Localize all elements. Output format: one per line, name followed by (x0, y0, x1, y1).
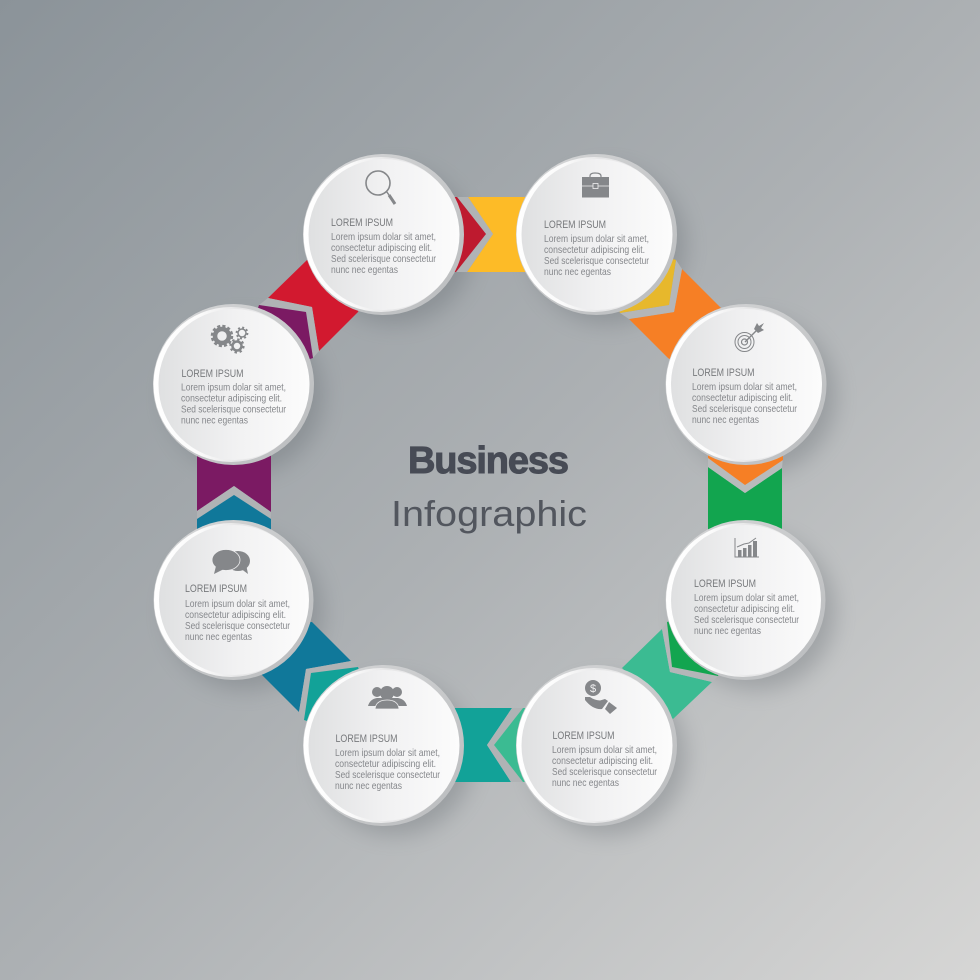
text: circle 8: Sed scelerisque consectetur (181, 404, 286, 416)
circle shadows (167, 168, 836, 835)
text: circle 6: nunc nec egentas (335, 781, 402, 792)
panel: circle 1 search (303, 154, 464, 315)
panel: circle 8 gears (153, 304, 314, 465)
text: circle 5: Sed scelerisque consectetur (552, 767, 657, 778)
panel: circle 2 briefcase (516, 154, 677, 315)
text: circle 4 (694, 578, 799, 637)
text: circle 8: LOREM IPSUM (182, 368, 244, 380)
text: circle 6: Sed scelerisque consectetur (335, 770, 440, 781)
text: circle 5: Lorem ipsum dolar sit amet, (552, 745, 657, 756)
icon: magnifier (366, 171, 395, 204)
text: circle 4: Sed scelerisque consectetur (694, 615, 799, 626)
text: circle 6 (335, 733, 440, 792)
icon: target (735, 323, 764, 352)
icon: briefcase (582, 173, 609, 198)
text: circle 4: Lorem ipsum dolar sit amet, (694, 593, 799, 604)
icon: gears (212, 326, 248, 352)
ribbon: red (233, 234, 383, 384)
text: circle 3: LOREM IPSUM (692, 367, 754, 379)
ribbon: green (708, 450, 783, 530)
text: circle 6: LOREM IPSUM (336, 733, 398, 745)
text: circle 3: nunc nec egentas (692, 415, 759, 426)
text: circle 7 (185, 583, 290, 643)
title (391, 440, 587, 534)
text: circle 4: consectetur adipiscing elit. (694, 604, 795, 615)
icon: hand with coin (585, 680, 617, 714)
text: circle 3 (692, 367, 797, 426)
text: circle 1: LOREM IPSUM (331, 217, 393, 229)
text: circle 7: Sed scelerisque consectetur (185, 621, 290, 632)
text: circle 7: nunc nec egentas (185, 632, 252, 643)
text: circle 2: LOREM IPSUM (544, 219, 606, 231)
text: circle 8 (181, 368, 286, 426)
text: circle 8: nunc nec egentas (181, 416, 248, 426)
icon: people (368, 686, 407, 709)
text: circle 2: nunc nec egentas (544, 267, 611, 278)
text: circle 7: consectetur adipiscing elit. (185, 610, 286, 621)
panel: circle 6 people (303, 665, 464, 826)
ribbon: light green (622, 600, 745, 719)
text: circle 1: consectetur adipiscing elit. (331, 243, 432, 254)
ribbon: yellow (440, 197, 530, 272)
text: circle 1 (331, 217, 436, 276)
title: Infographic (391, 493, 587, 534)
title: Business (408, 440, 569, 482)
ribbon: orange (596, 234, 725, 380)
text: circle 5: nunc nec egentas (552, 778, 619, 789)
ribbon: blue (240, 620, 383, 745)
panel: circle 5 money (516, 665, 677, 826)
text: circle 6: Lorem ipsum dolar sit amet, (335, 748, 440, 759)
text: circle 2 (544, 219, 649, 278)
text: circle 2: Sed scelerisque consectetur (544, 256, 649, 267)
text: circle 3: consectetur adipiscing elit. (692, 393, 793, 404)
text: circle 5: LOREM IPSUM (552, 730, 614, 742)
panel: circle 4 chart (666, 520, 826, 680)
text: circle 4: LOREM IPSUM (694, 578, 756, 590)
panel: circle 3 target (666, 304, 826, 465)
text: circle 2: Lorem ipsum dolar sit amet, (544, 234, 649, 245)
text: circle 2: consectetur adipiscing elit. (544, 245, 645, 256)
text: circle 1: nunc nec egentas (331, 265, 398, 276)
text: circle 4: nunc nec egentas (694, 626, 761, 637)
text: circle 3: Sed scelerisque consectetur (692, 404, 797, 415)
text: circle 7: Lorem ipsum dolar sit amet, (185, 599, 290, 610)
text: circle 8: Lorem ipsum dolar sit amet, (181, 382, 286, 394)
icon: bar chart (735, 538, 759, 557)
ribbon: purple (197, 450, 271, 535)
text: circle 7: LOREM IPSUM (185, 583, 247, 595)
text: circle 1: Sed scelerisque consectetur (331, 254, 436, 265)
icon: hand with coin: $ (590, 683, 596, 695)
text: circle 1: Lorem ipsum dolar sit amet, (331, 232, 436, 243)
text: circle 5: consectetur adipiscing elit. (552, 756, 653, 767)
text: circle 6: consectetur adipiscing elit. (335, 759, 436, 770)
ribbon: teal (450, 708, 540, 782)
text: circle 8: consectetur adipiscing elit. (181, 394, 282, 404)
text: circle 3: Lorem ipsum dolar sit amet, (692, 382, 797, 393)
panel: circle 7 chat (154, 520, 314, 680)
icon: speech bubbles (212, 550, 250, 574)
text: circle 5 (552, 730, 657, 789)
